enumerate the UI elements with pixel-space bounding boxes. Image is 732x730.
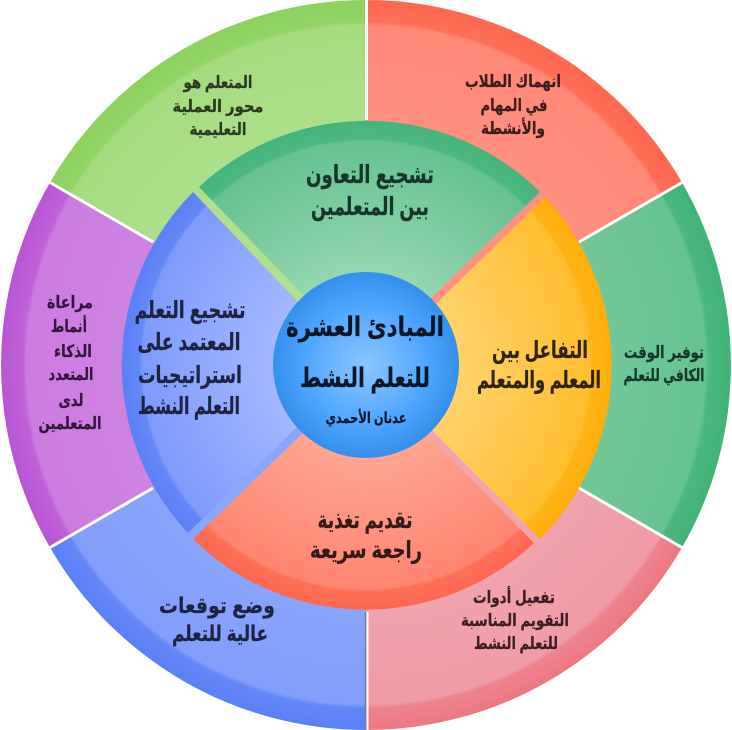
panel: quick feedback: تقديم تغذية (318, 507, 412, 534)
panel: active learning strategies: التعلم النشط (138, 393, 240, 420)
panel: enough time for learning: الكافي للتعلم (624, 366, 704, 386)
panel: multiple intelligences: مراعاة (47, 293, 93, 313)
panel: cooperation among learners: بين المتعلمين (311, 193, 429, 222)
panel: multiple intelligences: لدى (58, 391, 84, 410)
panel: high expectations (50, 365, 366, 730)
panel: student engagement: انهماك الطلاب (465, 72, 561, 92)
panel: student engagement (366, 0, 682, 365)
panel: learner at the centre: التعليمية (190, 120, 246, 139)
title: للتعلم النشط (300, 363, 430, 393)
panel: enough time for learning (366, 182, 731, 548)
author name: عدنان الأحمدي (326, 409, 406, 428)
inner ring of four principles (122, 121, 612, 610)
panel: learner at the centre (50, 0, 366, 365)
panel: teacher and learner interaction: التفاعل بين (492, 337, 588, 364)
panel: active learning strategies (122, 192, 340, 533)
panel: multiple intelligences: الذكاء (54, 342, 92, 361)
panel: student engagement: والأنشطة (481, 118, 545, 139)
panel: teacher and learner interaction: المعلم والمتعلم (477, 367, 601, 394)
title (286, 312, 444, 393)
title: المبادئ العشرة (286, 312, 444, 343)
panel: student engagement: في المهام (480, 96, 548, 116)
panel: learner at the centre: محور العملية (172, 97, 264, 117)
panel: assessment tools: للتعلم النشط (474, 634, 558, 653)
panel: active learning strategies: تشجيع التعلم (134, 297, 246, 324)
panel: quick feedback (193, 390, 534, 610)
centre hub with main title (273, 272, 459, 458)
panel: assessment tools: التقويم المناسبة (461, 611, 569, 631)
panel: quick feedback: راجعة سريعة (310, 537, 422, 564)
panel: high expectations: وضع توقعات (159, 593, 275, 619)
panel: active learning strategies: استراتيجيات (138, 362, 242, 389)
panel: high expectations: عالية للتعلم (172, 621, 268, 646)
panel: active learning strategies: المعتمد على (138, 329, 240, 356)
panel: multiple intelligences: المتعدد (48, 365, 94, 384)
panel: multiple intelligences (1, 182, 366, 548)
panel: enough time for learning: توفير الوقت (624, 343, 704, 363)
panel: teacher and learner interaction (390, 197, 612, 539)
panel: learner at the centre: المتعلم هو (183, 73, 252, 93)
panel: cooperation among learners (199, 121, 540, 340)
panel: multiple intelligences: المتعلمين (38, 414, 102, 434)
panel: assessment tools (366, 365, 682, 730)
panel: multiple intelligences: أنماط (51, 315, 87, 336)
panel: cooperation among learners: تشجيع التعاون (306, 161, 434, 190)
panel: assessment tools: تفعيل أدوات (473, 586, 555, 608)
